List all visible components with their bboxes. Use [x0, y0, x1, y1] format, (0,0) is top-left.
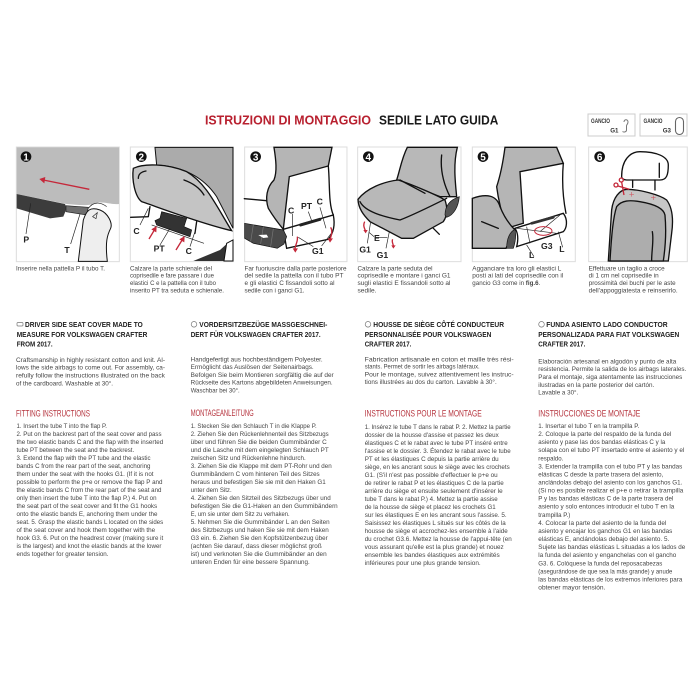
- instructions: French: sur les élastiques E en les ancrant sous l'assise. 5.: [365, 512, 507, 519]
- panel 6: headrest: 6: [597, 152, 603, 163]
- instructions: Spanish: (Si no es posible realizar el p+e o retirar la trampilla: [538, 488, 684, 495]
- instructions: English: possible to perform the p+e or remove the flap P and: [16, 479, 163, 486]
- heading: French: HOUSSE DE SIÈGE CÔTÉ CONDUCTEUR: [373, 320, 505, 329]
- instructions: Spanish: [538, 423, 686, 592]
- section heading: instructions pour le montage: INSTRUCTIONS POUR LE MONTAGE: [365, 408, 482, 418]
- description: Spanish: resistencia. Permite la salida de los airbags laterales.: [538, 366, 687, 373]
- instructions: German: und die Lasche mit dem eingelegten Schlauch PT: [191, 447, 329, 454]
- red hook arrows: [295, 227, 332, 249]
- label T: T: [64, 245, 70, 255]
- instructions: Spanish: G3. 6. Colóquese la funda del reposacabezas: [538, 560, 662, 567]
- description: French: [365, 356, 514, 386]
- caption 5: gancio G3 come in fig.6.: [472, 280, 541, 287]
- white lower panel: [283, 215, 334, 248]
- heading: Spanish: FUNDA ASIENTO LADO CONDUCTOR: [546, 320, 668, 329]
- description: English: lows the side airbags to come out. For assembly, ca-: [16, 364, 165, 372]
- instructions: Spanish: 1. Insertar el tubo T en la trampilla P.: [538, 423, 640, 430]
- labels: G1: [312, 246, 324, 256]
- instructions: English: is the largest) and knot the elastic bands at the lower: [16, 543, 162, 550]
- legend: gancio G3: G3: [663, 128, 672, 134]
- section heading: Montageanleitung: MONTAGEANLEITUNG: [191, 408, 254, 418]
- instructions: German: unteren Enden für eine bessere Spannung.: [191, 559, 310, 566]
- label P: P: [23, 234, 29, 244]
- instructions: English: only then insert the tube T into the flap P.) 4. Put on: [16, 495, 157, 502]
- instructions: German: befestigen Sie die G1-Haken an den Gummibändern: [191, 503, 338, 510]
- instructions: Spanish: las bandas elásticas de los extremos inferiores para: [538, 576, 683, 583]
- caption 2: Calzare la parte schienale del: [130, 265, 212, 272]
- description: Spanish: [538, 359, 687, 396]
- description: Spanish: Lavable a 30°.: [538, 388, 579, 396]
- instructions: English: the elastic bands C from the rear part of the seat and: [16, 487, 162, 494]
- legend: gancio G1: GANCIO: [591, 118, 610, 125]
- description: German: Befolgen Sie beim Montieren sorgfältig die auf der: [191, 372, 334, 379]
- instructions: English: 3. Extend the flap with the PT tube and the elastic: [16, 455, 150, 462]
- instructions: French: dossier de la housse d'assise et passez les deux: [365, 432, 500, 439]
- description: English: refully follow the instructions illustrated on the back: [16, 372, 166, 379]
- heading: French: CRAFTER 2017.: [365, 340, 411, 348]
- instructions: German: unter dem Sitz.: [191, 487, 232, 494]
- instructions: Spanish: anclándolas debajo del asiento con los ganchos G1.: [538, 480, 683, 486]
- caption 6: [589, 265, 678, 295]
- labels: [133, 226, 193, 256]
- red arrows: [364, 222, 393, 246]
- legend: gancio G3: [640, 114, 687, 136]
- instructions: Spanish: la funda del asiento y enganchelas con el gancho: [538, 552, 677, 559]
- caption 2: [130, 265, 224, 295]
- caption 3: e gli elastici C fissandoli sotto al: [244, 280, 334, 287]
- panel 4: seat cushion: 4: [366, 152, 372, 163]
- labels: L: [559, 244, 565, 254]
- labels: PT: [154, 244, 165, 254]
- hand: [78, 209, 111, 261]
- description: Spanish: Para el montaje, siga atentamente las instrucciones: [538, 374, 682, 381]
- labels: [529, 241, 565, 260]
- instructions: French: [365, 424, 512, 567]
- instructions: German: über und führen Sie die beiden Gummibänder C: [191, 439, 327, 446]
- instructions: German: heraus und befestigen Sie sie mit den Haken G1: [191, 479, 326, 486]
- heading: German: [191, 320, 328, 339]
- caption 6: prossimità dei buchi per le aste: [589, 280, 676, 287]
- instructions: German: 3. Ziehen Sie die Klappe mit dem PT-Rohr und den: [191, 463, 332, 470]
- panel 2: backrest: 2: [139, 152, 145, 163]
- heading: German: DERT FÜR VOLKSWAGEN CRAFTER 2017.: [191, 330, 321, 339]
- step number 6: [594, 151, 605, 162]
- dark side panel: [445, 197, 459, 217]
- instructions: Spanish: Sujete las bandas elásticas L situadas a los lados de: [538, 544, 686, 551]
- red arrow: [43, 180, 89, 189]
- instructions: German: 2. Ziehen Sie den Rückenlehnenteil des Sitzbezugs: [191, 431, 329, 438]
- instructions: German: [191, 423, 338, 566]
- instructions: Spanish: 2. Coloque la parte del respaldo de la funda del: [538, 431, 671, 438]
- description: German: Waschbar bei 30°.: [191, 387, 240, 395]
- description: French: stants. Permet de sortir les airbags latéraux.: [365, 364, 480, 371]
- step number 4: [363, 151, 374, 162]
- caption 1: Inserire nella pattella P il tubo T.: [16, 265, 105, 272]
- caption 4: sedile.: [358, 288, 377, 295]
- instructions: French: élastiques C et le rabat avec le tube PT inséré entre: [365, 440, 508, 447]
- instructions: French: G1. (S'il n'est pas possible d'effectuer le p+e ou: [365, 472, 498, 479]
- description: English: of the cardboard. Washable at 30°.: [16, 379, 113, 387]
- tube PT: [301, 219, 320, 225]
- section heading: fitting instructions: FITTING INSTRUCTIONS: [16, 408, 90, 418]
- title: SEDILE LATO GUIDA: [379, 114, 498, 128]
- instructions: German: E, um sie unter dem Sitz zu verhaken.: [191, 511, 290, 518]
- caption 6: Effettuare un taglio a croce: [589, 265, 665, 272]
- labels: C: [317, 197, 324, 207]
- heading: Spanish: [538, 320, 679, 348]
- panel 1: insert tube: 1: [23, 152, 29, 163]
- instructions: German: des Sitzbezugs und haken Sie sie mit dem Haken: [191, 527, 329, 534]
- instructions: English: 2. Put on the backrest part of the seat cover and pass: [16, 431, 162, 438]
- instructions: Spanish: solapa con el tubo PT insertado entre el asiento y el: [538, 447, 684, 454]
- instructions: English: tube PT between the seat and the backrest.: [16, 447, 134, 454]
- caption 3: Far fuoriuscire dalla parte posteriore: [244, 265, 347, 272]
- legend: gancio G1: G1: [610, 128, 619, 134]
- red arrows: [149, 229, 183, 250]
- title: ISTRUZIONI DI MONTAGGIO: [205, 114, 371, 128]
- instructions: French: de retirer le rabat P et les élastiques C de la partie: [365, 480, 504, 487]
- caption 4: [358, 265, 451, 295]
- instructions: French: inférieures pour une plus grande tension.: [365, 560, 481, 567]
- white panel and elastics: [515, 213, 566, 247]
- instructions: Spanish: 4. Colocar la parte del asiento de la funda del: [538, 520, 666, 527]
- description: German: Handgefertigt aus hochbeständigem Polyester.: [191, 356, 323, 363]
- labels: PT: [301, 201, 313, 211]
- caption 6: di 1 cm nel coprisedile in: [589, 273, 659, 280]
- title: [205, 114, 498, 128]
- labels: G3: [541, 241, 553, 251]
- instructions: French: housse de siège et accrochez-les ensemble à l'aide: [365, 528, 508, 535]
- instructions: English: [16, 423, 164, 558]
- heading: French: PERSONNALISÉE POUR VOLKSWAGEN: [365, 330, 491, 339]
- instructions: English: of the seat cover and hook them together with the: [16, 527, 156, 534]
- instructions: German: ist) und verknoten Sie die Gummibänder an den: [191, 551, 327, 558]
- instructions: German: G3 ein. 6. Ziehen Sie den Kopfstützenbezug über: [191, 535, 328, 542]
- instructions: French: l'assise et le dossier. 3. Étendez le rabat avec le tube: [365, 446, 511, 455]
- labels: [288, 197, 324, 256]
- caption 3: sedile con i ganci G1.: [244, 288, 305, 295]
- section heading: instrucciones de montaje: INSTRUCCIONES DE MONTAJE: [538, 408, 640, 418]
- labels: G1: [359, 244, 371, 254]
- instructions: German: 1. Stecken Sie den Schlauch T in die Klappe P.: [191, 423, 317, 430]
- panel 3: flap under seat: [244, 147, 347, 262]
- instructions: French: 1. Insérez le tube T dans le rabat P. 2. Mettez la partie: [365, 424, 511, 431]
- caption 5: [472, 265, 563, 287]
- instructions: French: PT et les élastiques C depuis la partie arrière du: [365, 456, 499, 463]
- caption 3: del sedile la pattella con il tubo PT: [244, 273, 344, 280]
- instructions: Spanish: P y las bandas elásticas C de la parte trasera del: [538, 496, 673, 503]
- description: German: Rückseite des Kartons abgebildeten Anweisungen.: [191, 380, 333, 387]
- labels: G1: [377, 250, 388, 260]
- instructions: German: Gummibändern C vom hinteren Teil des Sitzes: [191, 471, 320, 478]
- heading: Spanish: CRAFTER 2017.: [538, 340, 585, 348]
- instructions: Spanish: elásticas E, anclándolas debajo del asiento. 5.: [538, 536, 670, 543]
- instructions: English: the seat part of the seat cover and fit the G1 hooks: [16, 503, 157, 510]
- step number 2: [136, 151, 147, 162]
- panel 4: seat cushion: [358, 147, 461, 262]
- instructions: English: seat. 5. Grasp the elastic bands L located on the sides: [16, 519, 163, 526]
- heading: English: DRIVER SIDE SEAT COVER MADE TO: [25, 320, 143, 329]
- instructions: English: bands C from the rear part of the seat, anchoring: [16, 463, 151, 470]
- instructions: Spanish: 3. Extender la trampilla con el tubo PT y las bandas: [538, 463, 682, 470]
- description: German: Ermöglicht das Auslösen der Seitenairbags.: [191, 364, 314, 371]
- tube T: [66, 206, 88, 215]
- caption 2: inserito PT tra seduta e schienale.: [130, 288, 224, 295]
- instructions: French: ensemble les bandes élastiques aux extrémités: [365, 552, 500, 559]
- heading: French: [365, 320, 505, 348]
- instructions: English: them under the seat with the hooks G1. (If it is not: [16, 471, 154, 478]
- labels: C: [133, 226, 140, 236]
- panel 1: insert tube: [16, 147, 119, 262]
- caption 5: posti ai lati del coprisedile con il: [472, 273, 563, 280]
- panel 2: backrest: [130, 147, 233, 262]
- instructions: Spanish: asiento y encajar los ganchos G1 en las bandas: [538, 528, 672, 535]
- heading: English: MEASURE FOR VOLKSWAGEN CRAFTER: [17, 330, 148, 339]
- scissors: [614, 178, 629, 195]
- caption 4: Calzare la parte seduta del: [358, 265, 432, 272]
- instructions: Spanish: trampilla P.): [538, 512, 570, 519]
- caption 4: coprisedile e montare i ganci G1: [358, 273, 451, 280]
- legend: gancio G1: [588, 114, 635, 136]
- description: Spanish: ilustradas en la parte posterior del cartón.: [538, 382, 655, 389]
- flap PT: [155, 212, 192, 237]
- description: French: tions illustrées au dos du carton. Lavable à 30°.: [365, 378, 497, 386]
- red circle: [535, 227, 552, 235]
- instructions: English: onto the elastic bands E, anchoring them under the: [16, 511, 158, 518]
- heading: English: [17, 320, 148, 348]
- instructions: French: de la housse de siège et placez les crochets G1: [365, 504, 496, 511]
- description: English: Craftsmanship in highly resistant cotton and knit. Al-: [16, 357, 165, 364]
- caption 4: sugli elastici E fissandoli sotto al: [358, 280, 450, 287]
- instructions: French: du crochet G3.6. Mettez la housse de l'appui-tête (en: [365, 536, 512, 543]
- instructions: Spanish: elásticas C desde la parte trasera del asiento,: [538, 471, 664, 478]
- instructions: English: ends together for greater tension.: [16, 551, 109, 558]
- instructions: English: the two elastic bands C and the flap with the inserted: [16, 439, 164, 446]
- labels: C: [288, 205, 295, 215]
- instructions: Spanish: respaldo.: [538, 455, 564, 462]
- step number 3: [250, 151, 261, 162]
- labels: L: [529, 250, 535, 260]
- panel 3: flap under seat: 3: [253, 152, 259, 163]
- panel 6: headrest: [589, 147, 687, 262]
- red cross marks: [629, 192, 656, 200]
- description: German: [191, 356, 334, 395]
- instructions: Spanish: asiento y pase las dos bandas elásticas C y la: [538, 439, 666, 446]
- panel 5: elastic L with hook G3: [472, 147, 575, 262]
- seat bottom corner: [193, 244, 233, 261]
- labels: C: [186, 246, 193, 256]
- step number 5: [478, 151, 488, 162]
- instructions: French: Saisissez les élastiques L situés sur les côtés de la: [365, 520, 506, 527]
- instructions: Spanish: asiento y solo entonces introducir el tubo T en la: [538, 504, 675, 511]
- instructions: English: hook G3. 6. Put on the headrest cover (making sure it: [16, 535, 163, 542]
- heading: English: FROM 2017.: [17, 340, 53, 348]
- dark seat side: [245, 223, 287, 248]
- labels: E: [374, 233, 380, 243]
- description: French: Fabrication artisanale en coton et maille très rési-: [365, 356, 514, 363]
- caption 5: Agganciare tra loro gli elastici L: [472, 265, 562, 272]
- caption 2: coprisedile e fare passare i due: [130, 273, 214, 280]
- step number 1: [21, 151, 31, 162]
- instructions: French: arrière du siège et ensuite seulement d'insérer le: [365, 488, 503, 495]
- instructions: Spanish: obtener mayor tensión.: [538, 584, 606, 592]
- caption 6: dell'appoggiatesta e reinserirlo.: [589, 288, 678, 295]
- instructions: French: siège, en les ancrant sous le siège avec les crochets: [365, 464, 510, 471]
- instructions: French: tube T dans le rabat P.) 4. Mettez la partie assise: [365, 496, 498, 503]
- instructions: German: 5. Nehmen Sie die Gummibänder L an den Seiten: [191, 519, 330, 526]
- flap P: [17, 194, 67, 218]
- description: English: [16, 357, 166, 387]
- description: Spanish: Elaboración artesanal en algodón y punto de alta: [538, 359, 677, 366]
- caption 2: elastici C e la pattella con il tubo: [130, 280, 216, 287]
- panel 5: elastic L with hook G3: 5: [480, 152, 486, 163]
- heading: German: VORDERSITZBEZÜGE MASSGESCHNEI-: [199, 320, 328, 329]
- legend: gancio G3: GANCIO: [644, 118, 663, 125]
- instructions: English: 1. Insert the tube T into the flap P.: [16, 423, 107, 430]
- instructions: French: vous assurant qu'elle est la plus grande) et nouez: [365, 544, 504, 551]
- heading: Spanish: PERSONALIZADA PARA FIAT VOLKSWAGEN: [538, 330, 679, 339]
- instructions: German: 4. Ziehen Sie den Sitzteil des Sitzbezugs über und: [191, 495, 331, 502]
- labels: [359, 233, 388, 260]
- dark side panel: [507, 229, 516, 248]
- instructions: Spanish: (asegurándose de que sea la más grande) y anude: [538, 568, 673, 575]
- caption 3: [244, 265, 347, 295]
- description: French: Pour le montage, suivez attentivement les instruc-: [365, 372, 514, 379]
- instructions: German: (achten Sie darauf, dass dieser möglichst groß: [191, 543, 322, 550]
- instructions: German: zwischen Sitz und Rückenlehne hindurch.: [191, 455, 306, 462]
